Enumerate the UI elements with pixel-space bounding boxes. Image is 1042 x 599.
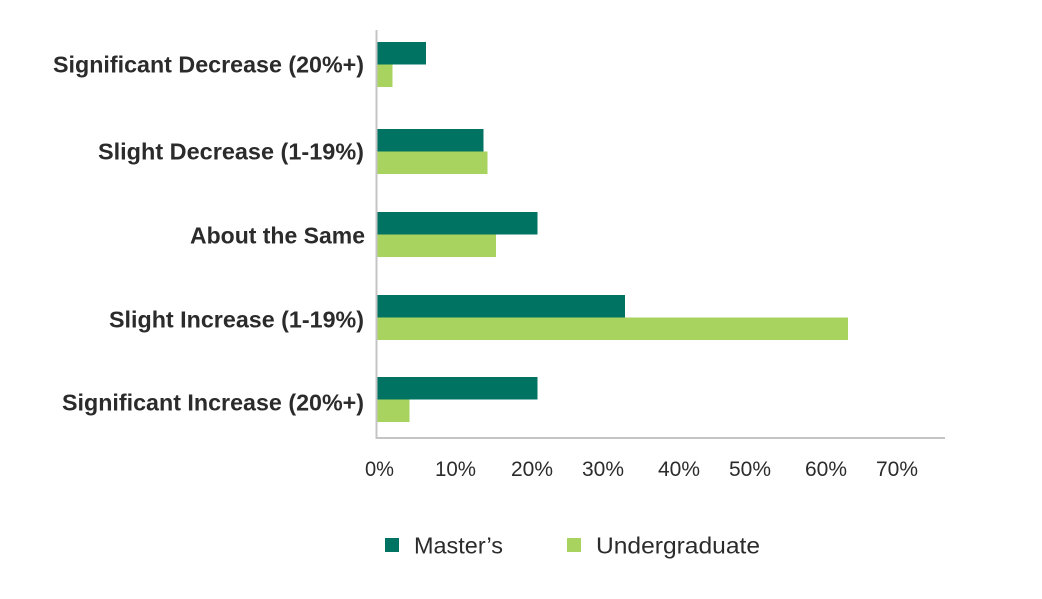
bars: Significant Decrease <box>377 42 426 87</box>
legend: Master's: Master’s <box>414 532 503 558</box>
axes <box>376 30 945 439</box>
x-axis tick labels: 70% <box>876 457 918 481</box>
x-axis tick labels: 20% <box>511 457 553 481</box>
x-axis tick labels: 10% <box>435 457 476 481</box>
category labels: Slight Decrease (1-19%) <box>98 138 364 164</box>
legend: Undergraduate: Undergraduate <box>596 532 760 558</box>
category labels: About the Same <box>190 222 365 248</box>
legend <box>385 532 760 558</box>
category labels <box>53 52 365 416</box>
x-axis tick labels <box>365 457 918 481</box>
category labels: Significant Increase (20%+) <box>62 390 364 416</box>
x-axis tick labels: 50% <box>729 457 771 481</box>
bars: Significant Increase <box>377 377 538 422</box>
x-axis tick labels: 40% <box>658 457 700 481</box>
category labels: Slight Increase (1-19%) <box>109 306 364 332</box>
x-axis tick labels: 0% <box>365 457 394 481</box>
x-axis tick labels: 60% <box>805 457 847 481</box>
bars: Slight Increase <box>377 295 848 340</box>
category labels: Significant Decrease (20%+) <box>53 52 364 78</box>
bars: About the Same <box>377 212 538 257</box>
bars: Slight Decrease <box>377 129 488 174</box>
x-axis tick labels: 30% <box>582 457 624 481</box>
